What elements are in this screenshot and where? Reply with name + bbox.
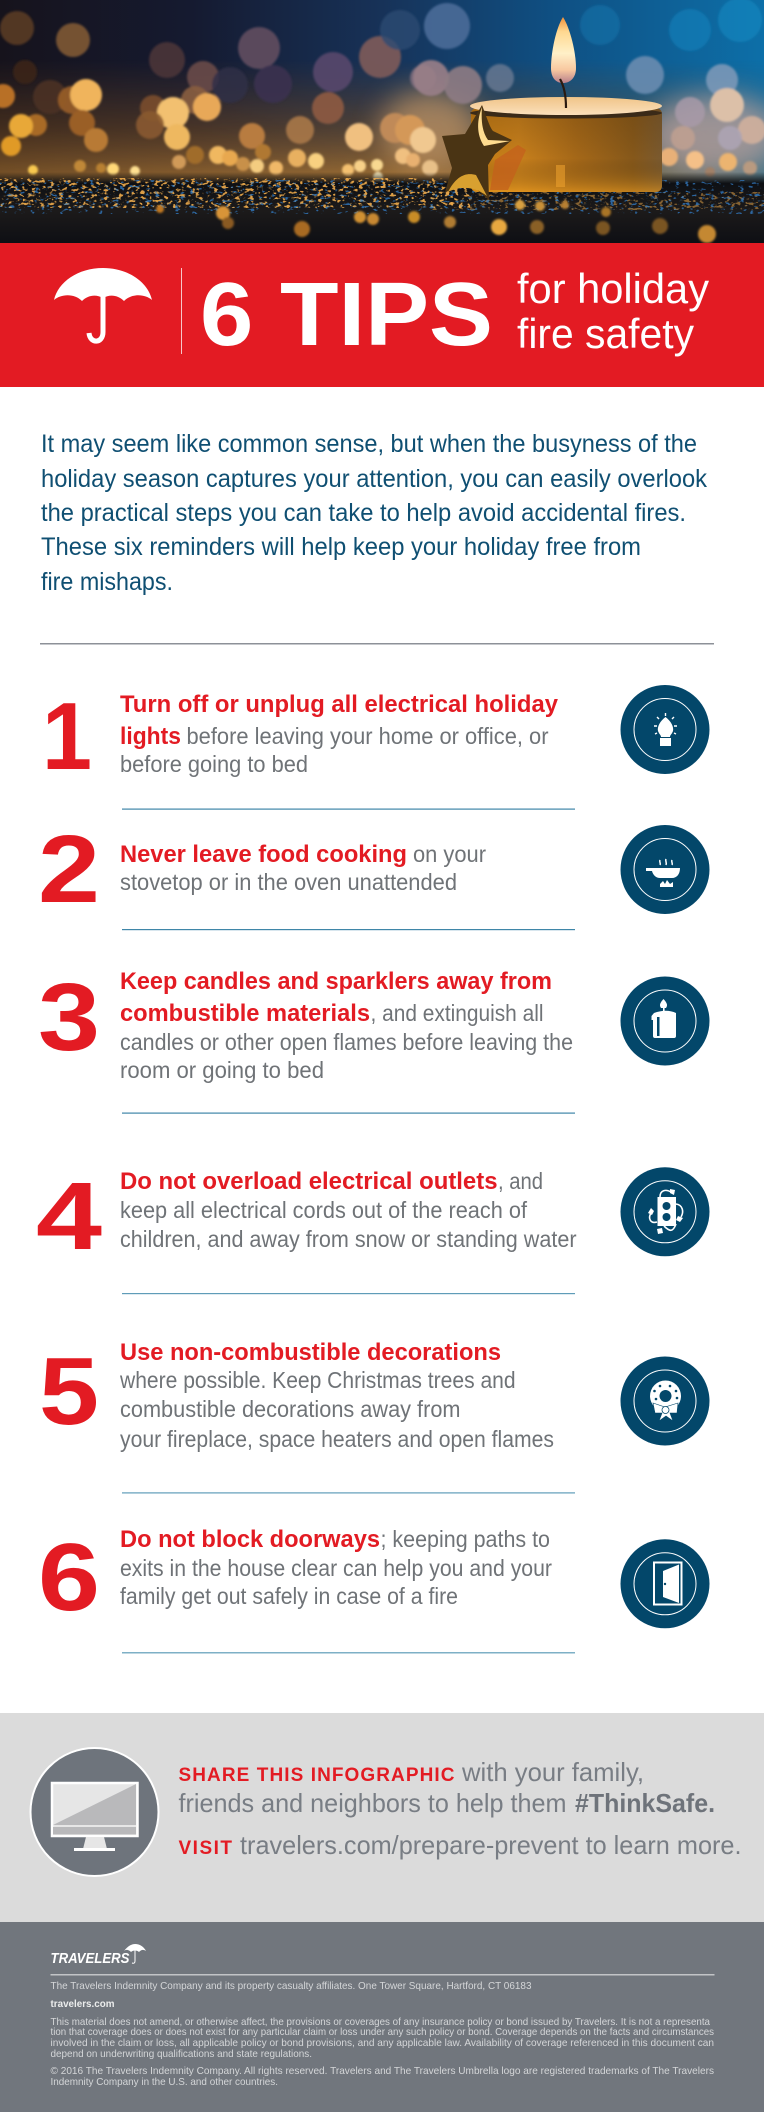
tip 1: 1 (42, 683, 92, 790)
tip 3 text: combustible materials (120, 1000, 370, 1027)
tip 3 (38, 964, 710, 1083)
disclaimer: depend on underwriting qualifications and state regulations. (50, 2048, 312, 2060)
tip 6 (38, 1524, 710, 1631)
subtitle: for holiday (517, 265, 709, 312)
icon: computer monitor (30, 1748, 158, 1876)
icon: wreath (620, 1356, 710, 1446)
tip 4 text: , and (498, 1168, 543, 1194)
intro paragraph (41, 430, 707, 596)
icon: umbrella (54, 268, 152, 341)
tip 4: 4 (36, 1163, 102, 1270)
intro paragraph: holiday season captures your attention, you can easily overlook (41, 465, 707, 493)
tip 1 text: before leaving your home or office, or (186, 723, 549, 749)
tip 2 text: Never leave food cooking (120, 841, 407, 868)
tip 1 text (120, 691, 559, 777)
intro paragraph: fire mishaps. (41, 568, 173, 596)
candle (470, 17, 662, 192)
share text (178, 1757, 742, 1860)
icon: pan on burner (620, 825, 710, 914)
tip 5: 5 (39, 1338, 99, 1445)
disclaimer: tion that coverage does or does not exist for any particular claim or loss under any such policy or bond. Coverage depends on the facts and circumstances (50, 2026, 714, 2038)
copyright: © 2016 The Travelers Indemnity Company. All rights reserved. Travelers and The Travelers Umbrella logo are registered trademarks of The Travelers (50, 2065, 714, 2077)
share text: #ThinkSafe. (575, 1788, 715, 1818)
hero photo: candle and golden bokeh (0, 0, 764, 243)
icon: light bulb (620, 685, 710, 774)
tip 4 text: keep all electrical cords out of the reach of (120, 1197, 528, 1223)
wick (560, 79, 566, 108)
tip 6 text: exits in the house clear can help you and your (120, 1555, 552, 1581)
tip 2 text (120, 841, 486, 895)
tip 5 text: combustible decorations away from (120, 1396, 460, 1422)
tip 3 text: Keep candles and sparklers away from (120, 968, 552, 995)
tip 3 text: room or going to bed (120, 1057, 324, 1083)
intro paragraph: These six reminders will help keep your holiday free from (41, 533, 641, 561)
disclaimer (50, 2016, 714, 2060)
subtitle: fire safety (517, 310, 694, 357)
icon: electrical outlet (620, 1167, 710, 1256)
panel: share call to action (0, 1713, 764, 1922)
bokeh lights (0, 0, 764, 182)
tip 2 text: on your (413, 841, 486, 867)
intro paragraph: It may seem like common sense, but when the busyness of the (41, 430, 697, 458)
tip 4 (36, 1163, 710, 1270)
icon: door (620, 1539, 710, 1628)
share text: travelers.com/prepare-prevent to learn more. (240, 1830, 742, 1860)
tip 2 (38, 816, 710, 923)
tip 5 text: where possible. Keep Christmas trees and (119, 1367, 516, 1393)
tip 2 text: stovetop or in the oven unattended (120, 869, 457, 895)
share text: with your family, (461, 1757, 644, 1787)
tip 4 text: Do not overload electrical outlets (120, 1168, 498, 1195)
tip 3: 3 (38, 964, 100, 1071)
tip 6 text: family get out safely in case of a fire (120, 1583, 458, 1609)
disclaimer: involved in the claim or loss, all applicable policy or bond provisions, and any applicable law. Availability of coverage referenced in this document can (50, 2037, 714, 2049)
tip 4 text: children, and away from snow or standing water (120, 1226, 577, 1252)
tip 6 text: Do not block doorways (120, 1526, 380, 1553)
disclaimer: This material does not amend, or otherwise affect, the provisions or coverages of any insurance policy or bond issued by Travelers. It is not a representa (50, 2016, 710, 2028)
tip 5 text: your fireplace, space heaters and open flames (120, 1426, 554, 1452)
website: travelers.com (50, 1998, 114, 2010)
intro paragraph: the practical steps you can take to help avoid accidental fires. (41, 499, 686, 527)
tip 3 text: candles or other open flames before leaving the (120, 1029, 573, 1055)
share text: SHARE THIS INFOGRAPHIC (178, 1765, 455, 1786)
tip 6: 6 (38, 1524, 100, 1631)
icon: candle (620, 976, 710, 1066)
logo: Travelers: TRAVELERS (50, 1950, 130, 1967)
logo: Travelers (50, 1944, 146, 1967)
tip 4 text (120, 1168, 577, 1252)
copyright: Indemnity Company in the U.S. and other countries. (50, 2076, 278, 2088)
tip 6 text: ; keeping paths to (380, 1526, 550, 1552)
gold star (442, 105, 512, 200)
panel: footer (0, 1922, 764, 2112)
tip 5 (39, 1338, 710, 1452)
share text: friends and neighbors to help them (178, 1788, 566, 1818)
flame (551, 17, 576, 83)
address line: The Travelers Indemnity Company and its property casualty affiliates. One Tower Square, Hartford, CT 06183 (50, 1980, 532, 1992)
tip 1 text: lights (120, 723, 181, 750)
tip 3 text: , and extinguish all (370, 1000, 544, 1026)
tip 2: 2 (38, 816, 100, 923)
subtitle (517, 265, 709, 357)
tip 5 text (119, 1339, 554, 1452)
tip 1 text: Turn off or unplug all electrical holiday (120, 691, 559, 718)
share text: VISIT (178, 1838, 232, 1859)
title: 6 TIPS: 6 TIPS (200, 265, 493, 365)
tip 5 text: Use non-combustible decorations (120, 1339, 501, 1366)
title banner (0, 243, 764, 387)
tip 3 text (120, 968, 573, 1083)
tip 1 (42, 683, 710, 790)
copyright (50, 2065, 714, 2088)
tip 6 text (120, 1526, 552, 1609)
tip 1 text: before going to bed (120, 751, 308, 777)
